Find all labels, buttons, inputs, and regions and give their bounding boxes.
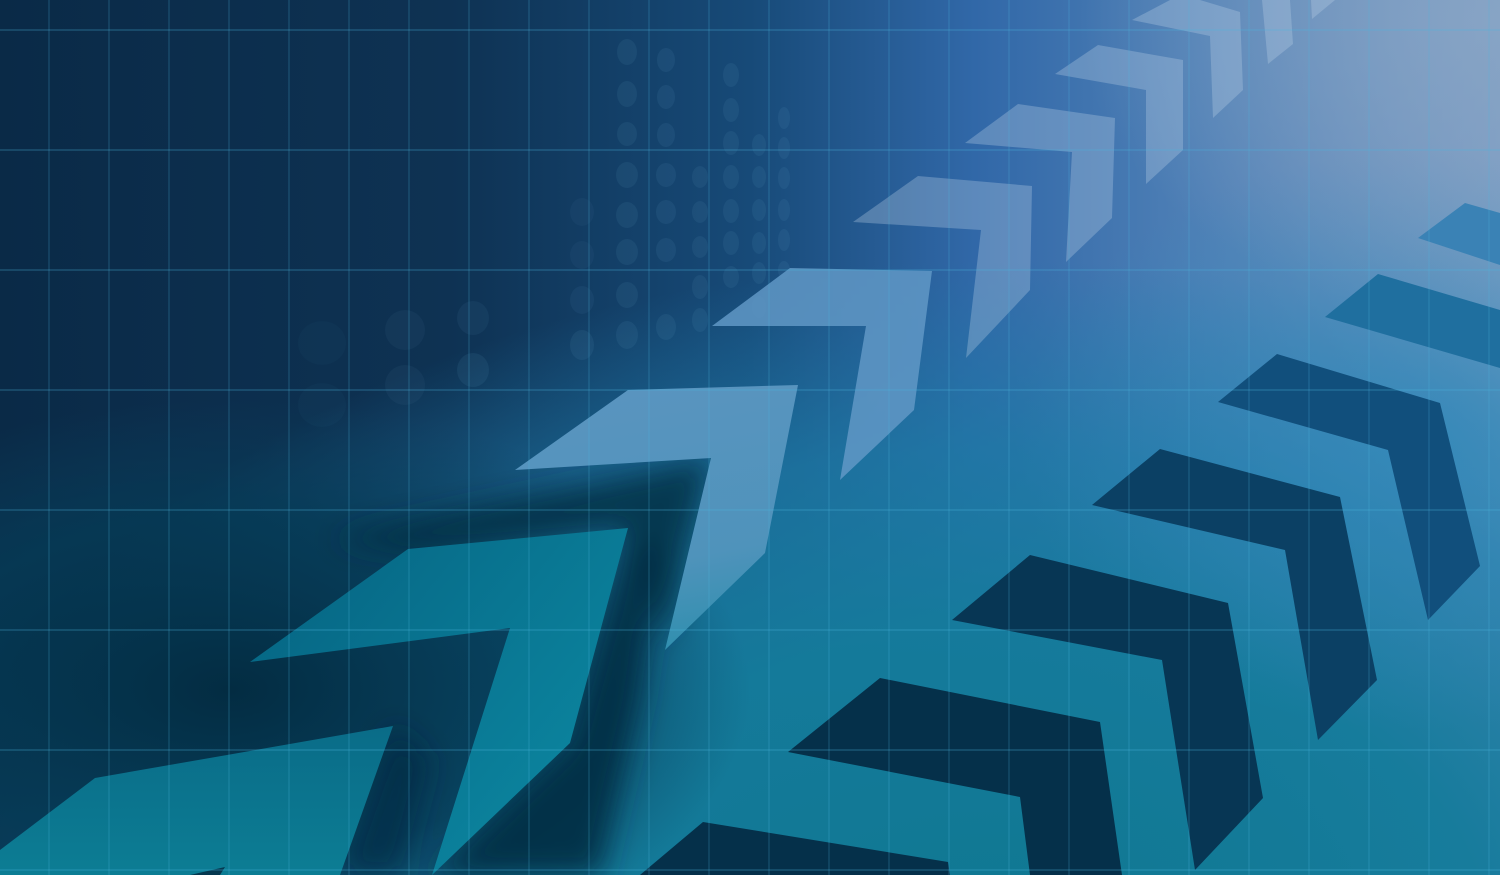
chevron R3 bbox=[1092, 449, 1377, 740]
chevron 1 bbox=[515, 385, 798, 650]
chevron B bbox=[0, 726, 393, 875]
chevron R4 bbox=[1218, 354, 1480, 620]
chevrons: teal lower left bbox=[0, 528, 628, 875]
chevron 8 bbox=[1311, 0, 1335, 19]
chevron small corner bbox=[190, 867, 225, 875]
halftone dots bbox=[298, 39, 790, 427]
chevrons: dark lower right bbox=[190, 203, 1500, 875]
chevron R6 bbox=[1418, 203, 1500, 265]
chevron 3 bbox=[853, 176, 1032, 358]
chevron 7 bbox=[1262, 0, 1293, 64]
chevron shadows bbox=[330, 458, 711, 875]
chevron R5 bbox=[1325, 274, 1500, 368]
chevron 2 bbox=[712, 268, 932, 480]
chevron 5 bbox=[1055, 45, 1183, 184]
chevron 6 bbox=[1132, 0, 1243, 118]
chevron R2 bbox=[952, 555, 1263, 870]
chevron R1 bbox=[788, 678, 1122, 875]
chevron 4 bbox=[965, 104, 1115, 262]
chevron R7 bbox=[640, 822, 950, 875]
chevron A bbox=[250, 528, 628, 875]
chevrons: light upper row bbox=[515, 0, 1335, 650]
